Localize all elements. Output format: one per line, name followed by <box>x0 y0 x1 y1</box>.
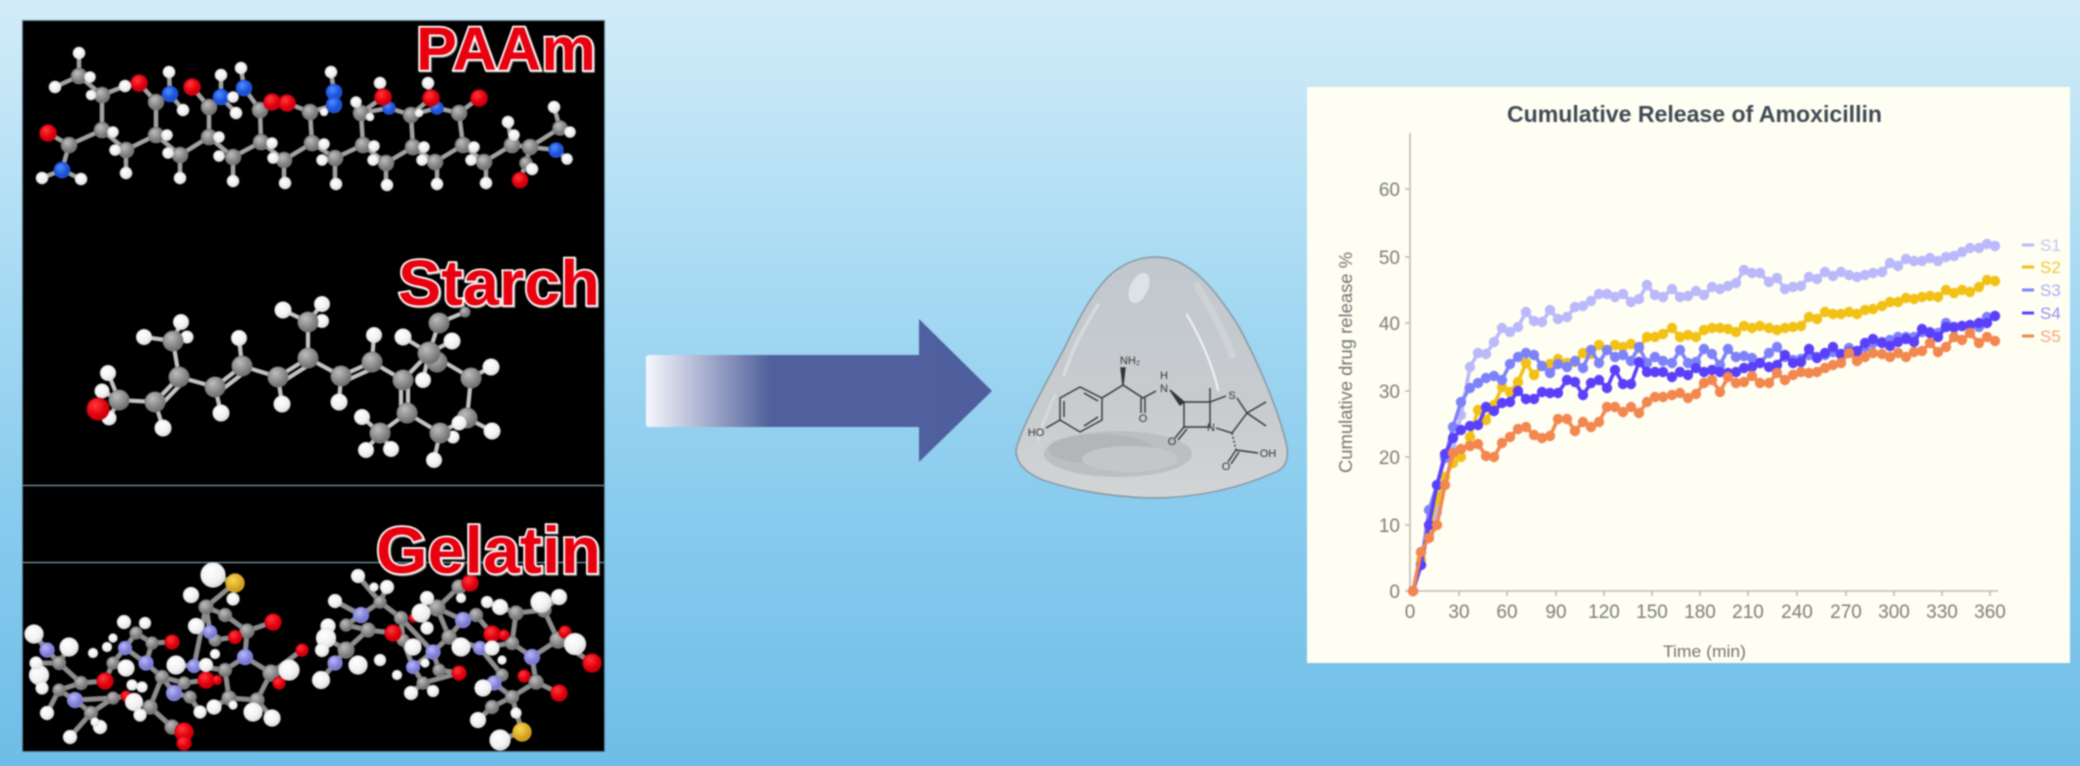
amoxicillin structure: S <box>1228 390 1236 402</box>
capsule body <box>1016 257 1287 498</box>
panel: cumulative release chart <box>1307 87 2070 663</box>
arrow: polymers to loaded hydrogel <box>646 319 992 462</box>
molecule: PAAm <box>36 48 575 190</box>
y-axis tick labels: 50 <box>1379 248 1400 269</box>
x-axis tick labels: 30 <box>1448 602 1470 623</box>
legend: S3 <box>2040 281 2061 300</box>
legend: S2 <box>2040 258 2061 277</box>
amoxicillin structure: O <box>1222 461 1231 473</box>
amoxicillin structure: H <box>1160 370 1168 382</box>
axes <box>1405 133 1998 596</box>
y-axis tick labels: 20 <box>1379 448 1400 469</box>
y-axis tick labels: 0 <box>1389 582 1400 603</box>
x-axis tick labels: 300 <box>1878 602 1910 623</box>
atom: oxygen <box>87 398 109 420</box>
series S3 <box>1413 316 1995 591</box>
y-axis title: Cumulative drug release % <box>1336 252 1356 473</box>
chart title: Cumulative Release of Amoxicillin <box>1507 101 1882 127</box>
legend: S5 <box>2040 327 2061 346</box>
x-axis tick labels <box>1405 602 2006 623</box>
series S1 <box>1413 244 1995 591</box>
label: Starch: Starch <box>398 247 600 319</box>
x-axis tick labels: 360 <box>1974 602 2006 623</box>
legend: S4 <box>2040 304 2061 323</box>
y-axis tick labels: 30 <box>1379 382 1400 403</box>
molecule: Gelatin <box>25 563 601 750</box>
y-axis tick labels: 40 <box>1379 314 1400 335</box>
legend <box>2022 236 2061 346</box>
x-axis tick labels: 90 <box>1545 602 1567 623</box>
amoxicillin structure: NH₂ <box>1120 355 1140 367</box>
x-axis tick labels: 270 <box>1830 602 1862 623</box>
x-axis tick labels: 210 <box>1732 602 1764 623</box>
label: Gelatin: Gelatin <box>376 513 601 587</box>
label: PAAm: PAAm <box>416 15 596 83</box>
y-axis tick labels: 60 <box>1379 180 1400 201</box>
x-axis tick labels: 330 <box>1926 602 1958 623</box>
amoxicillin structure <box>1028 355 1276 473</box>
capsule floor shadow <box>1044 431 1192 477</box>
x-axis tick labels: 0 <box>1405 602 1415 623</box>
legend: S1 <box>2040 236 2061 255</box>
amoxicillin structure: OH <box>1260 448 1276 460</box>
molecule: Starch <box>87 296 500 468</box>
series S5 <box>1413 333 1995 591</box>
amoxicillin structure: N <box>1160 383 1168 395</box>
x-axis tick labels: 240 <box>1781 602 1813 623</box>
panel: polymer molecular models <box>22 15 604 752</box>
x-axis tick labels: 120 <box>1588 602 1620 623</box>
amoxicillin structure: N <box>1207 422 1215 434</box>
amoxicillin structure: O <box>1168 436 1177 448</box>
x-axis tick labels: 180 <box>1684 602 1716 623</box>
x-axis tick labels: 60 <box>1496 602 1518 623</box>
x-axis tick labels: 150 <box>1636 602 1668 623</box>
icon: hydrogel capsule with amoxicillin <box>1016 257 1287 498</box>
amoxicillin structure: O <box>1139 413 1148 425</box>
capsule highlights <box>1038 270 1232 440</box>
series S4 <box>1413 316 1995 591</box>
x-axis title: Time (min) <box>1663 642 1746 661</box>
y-axis tick labels: 10 <box>1379 516 1400 537</box>
series S2 <box>1413 280 1995 591</box>
amoxicillin structure: HO <box>1028 427 1045 439</box>
y-axis tick labels <box>1379 180 1400 603</box>
